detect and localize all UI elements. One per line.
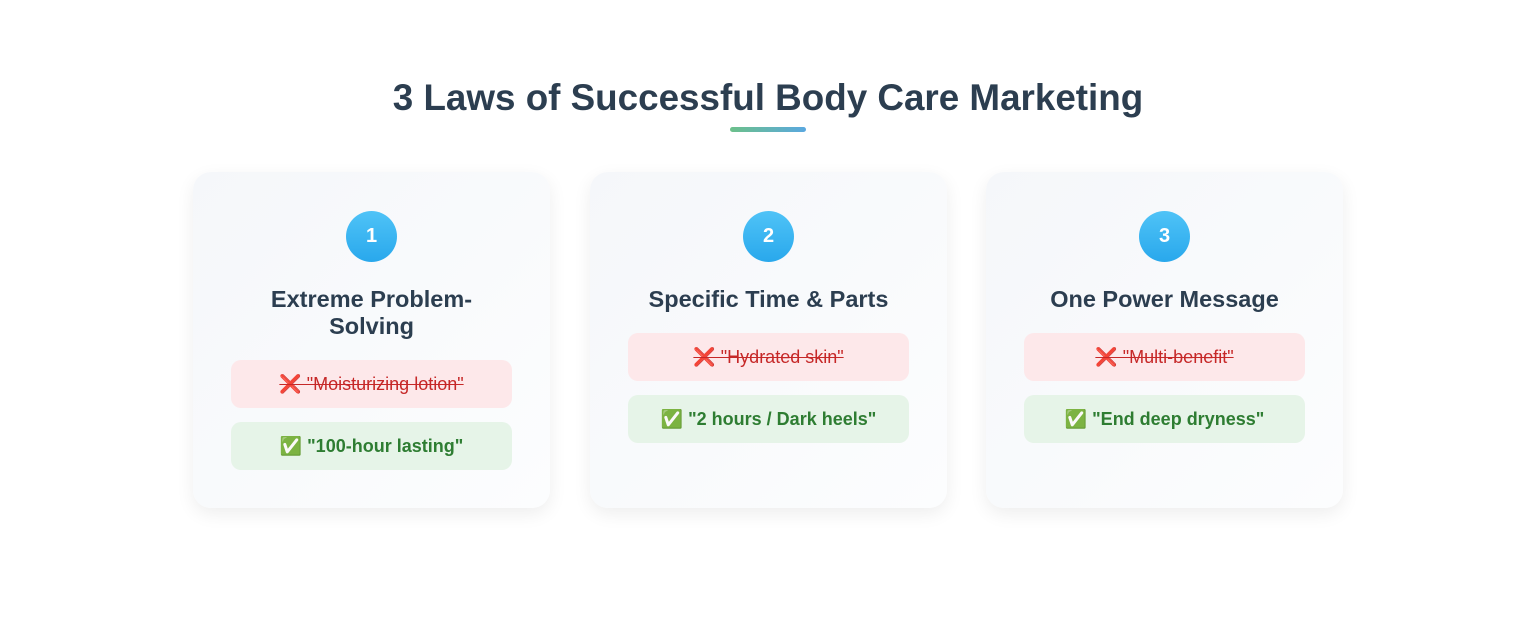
bad example 2: ❌ "Hydrated skin" [693,347,844,367]
heading 1 [271,286,472,339]
good example 2 [628,395,909,443]
number badge 3 [1139,211,1190,262]
panel: law 3 [986,172,1343,508]
good example 2: ✅ "2 hours / Dark heels" [661,409,876,429]
heading 2: Specific Time & Parts [649,286,888,312]
bad example 3 [1024,333,1305,381]
good example 3 [1024,395,1305,443]
bad example 1: ❌ "Moisturizing lotion" [279,374,464,394]
panel: law 1 [193,172,550,508]
number badge 2 [743,211,794,262]
number badge 3: 3 [1159,225,1170,247]
panel: law 2 [590,172,947,508]
bad example 3: ❌ "Multi-benefit" [1095,347,1234,367]
good example 1 [231,422,512,470]
title: 3 Laws of Successful Body Care Marketing [393,77,1143,118]
good example 1: ✅ "100-hour lasting" [280,436,463,456]
heading 3: One Power Message [1050,286,1279,312]
heading 1: Solving [329,313,414,339]
number badge 2: 2 [763,225,774,247]
heading 1: Extreme Problem- [271,286,472,312]
bad example 2 [628,333,909,381]
number badge 1 [346,211,397,262]
good example 3: ✅ "End deep dryness" [1065,409,1264,429]
title underline [730,127,806,132]
bad example 1 [231,360,512,408]
number badge 1: 1 [366,225,377,247]
